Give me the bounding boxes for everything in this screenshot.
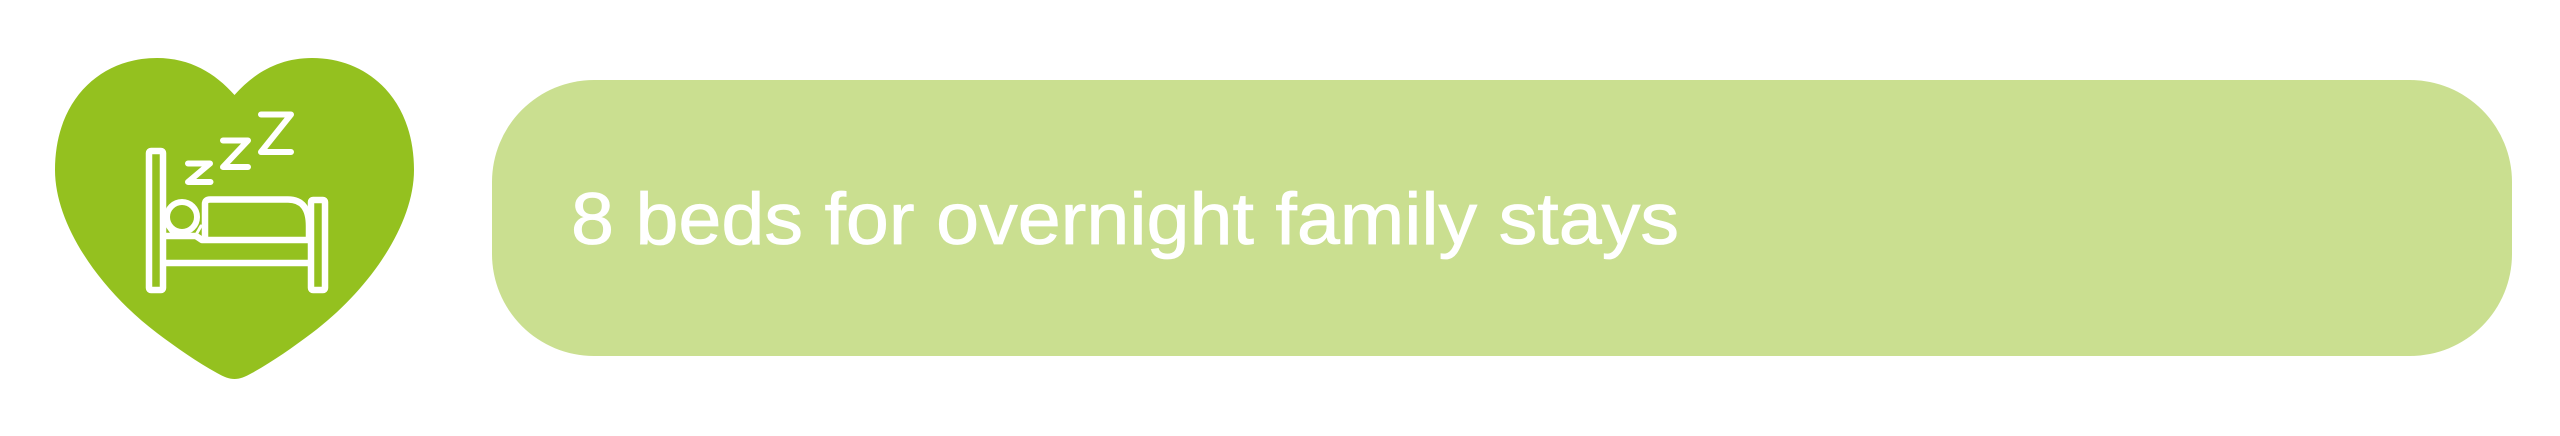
panel: caption background (492, 80, 2512, 356)
heart shape (55, 58, 414, 379)
icon: heart with sleeping person in bed (55, 58, 414, 379)
icon: bed (149, 151, 325, 290)
caption text: 8 beds for overnight family stays (571, 179, 1679, 260)
icon: sleeping z letters (188, 114, 291, 182)
